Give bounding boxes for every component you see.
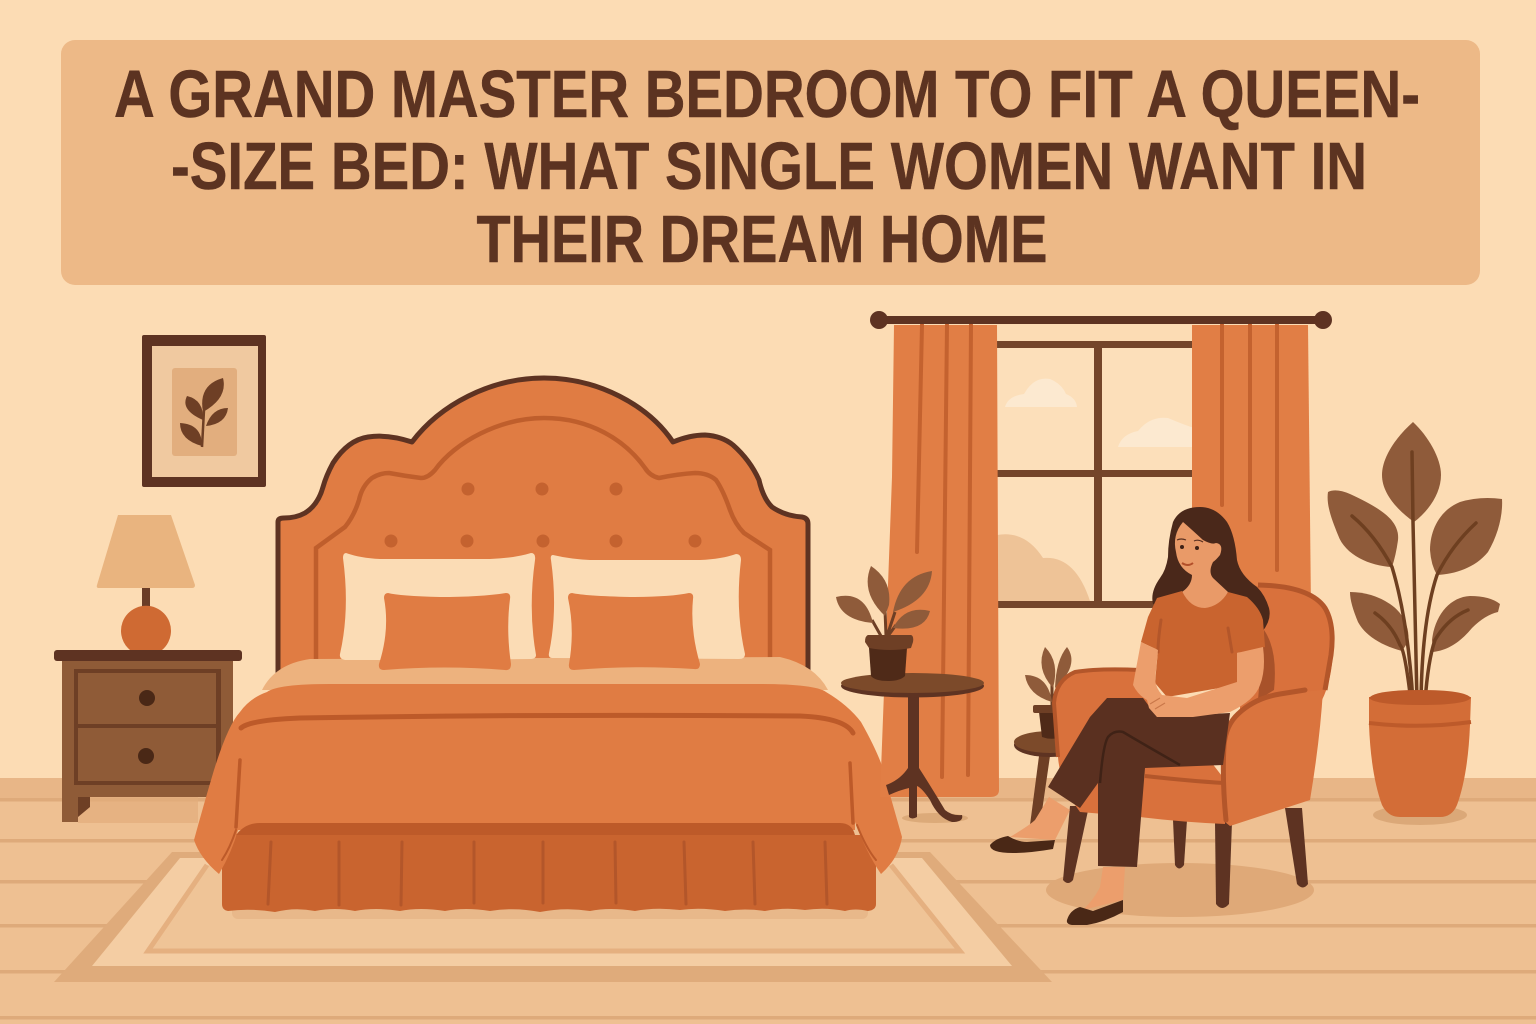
pot <box>1369 697 1471 817</box>
right foot and shoe <box>1083 867 1125 910</box>
chair legs <box>1063 806 1308 908</box>
bed skirt and duvet <box>194 684 902 919</box>
orange cushions <box>379 593 700 670</box>
duvet <box>194 684 902 874</box>
hair <box>1152 507 1270 632</box>
left foot and shoe <box>1010 797 1070 840</box>
leaves <box>1328 422 1502 652</box>
blanket top sheet <box>262 657 828 690</box>
lamp <box>97 515 195 650</box>
curtain rod <box>870 311 1332 329</box>
left curtain <box>880 325 999 797</box>
duvet fold lines <box>222 715 876 860</box>
right curtain <box>1192 325 1311 610</box>
side table with plant <box>836 566 984 823</box>
armchair <box>1046 585 1333 917</box>
right arm <box>1223 690 1323 826</box>
nightstand <box>54 650 242 823</box>
potted plant on table <box>836 566 932 681</box>
chair back <box>1240 586 1333 760</box>
clouds <box>1005 379 1077 407</box>
stems and veins <box>1352 452 1476 702</box>
skirt pleats <box>268 842 827 905</box>
white pillows <box>340 553 745 660</box>
title banner <box>61 40 1480 285</box>
seated woman <box>990 507 1270 925</box>
skirt top band <box>236 823 855 835</box>
wooden floor <box>0 778 1536 1024</box>
facial features <box>1177 539 1203 565</box>
face and neck <box>1175 522 1228 612</box>
headboard <box>278 378 808 672</box>
floor rug <box>54 852 1052 982</box>
stool with small plant <box>1014 647 1086 825</box>
left arm and seat <box>1053 669 1225 824</box>
arms <box>1133 642 1264 717</box>
bed shadow <box>232 905 868 919</box>
shirt <box>1141 591 1265 697</box>
framed wall art <box>142 335 266 487</box>
bed skirt <box>222 835 876 912</box>
large potted plant <box>1328 422 1502 825</box>
tufting buttons <box>384 482 702 548</box>
window <box>997 341 1194 608</box>
trousers <box>1048 698 1230 867</box>
wall background <box>0 0 1536 780</box>
window frame <box>997 341 1194 608</box>
title text <box>114 57 1420 277</box>
title text: THEIR DREAM HOME <box>476 202 1048 277</box>
